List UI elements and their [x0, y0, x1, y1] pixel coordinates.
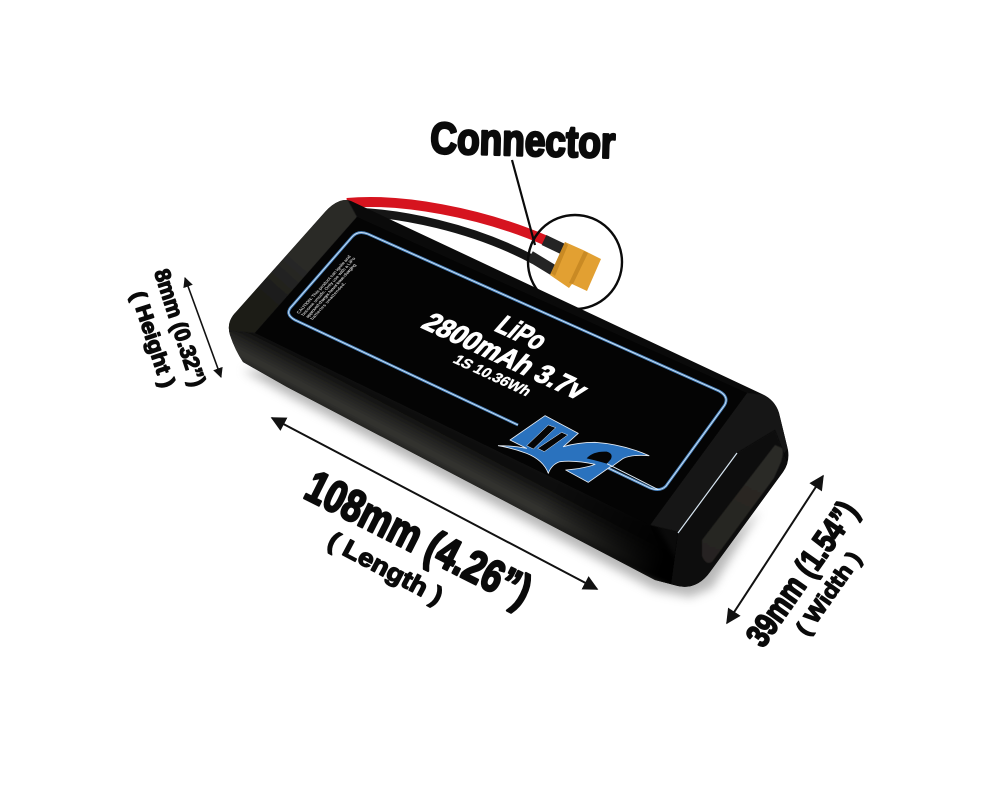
logo notch — [587, 452, 612, 464]
width value: 39mm (1.54”) — [738, 494, 865, 653]
caution text: approved charger. Never leave charging — [304, 263, 357, 319]
infographic: battery with dimensions — [128, 121, 864, 647]
caution text: CAUTION: This product can ignite and — [295, 254, 352, 314]
end highlight — [678, 453, 737, 533]
connector housing — [550, 242, 601, 291]
height value: 8mm (0.32”) — [149, 266, 211, 389]
battery wires — [347, 202, 547, 260]
heat shrink sleeves — [530, 240, 567, 270]
battery body — [224, 195, 795, 600]
capacity and voltage: 2800mAh 3.7v — [415, 308, 594, 405]
connector highlight circle — [528, 215, 622, 309]
end bottom dark — [670, 430, 790, 590]
height arrow — [185, 278, 221, 377]
height dimension — [126, 266, 221, 391]
logo border tail — [607, 464, 658, 490]
label border highlight — [289, 233, 726, 490]
side band — [225, 325, 680, 600]
LiPo title: LiPo — [488, 311, 554, 356]
width dimension — [727, 476, 866, 653]
length arrow — [272, 418, 597, 589]
cell spec: 1S 10.36Wh — [449, 352, 535, 399]
body shell — [229, 200, 788, 587]
caution text: batteries unattended. — [309, 282, 347, 321]
top cap — [224, 195, 357, 333]
connector shade — [551, 242, 588, 284]
black wire — [358, 212, 534, 260]
length caption: ( Length ) — [323, 527, 448, 610]
battery drop shadow — [243, 370, 760, 597]
end cap panel — [702, 445, 783, 563]
width arrow — [727, 476, 823, 623]
end band — [650, 394, 788, 531]
label face — [255, 217, 747, 525]
width caption: ( Width ) — [791, 547, 866, 640]
caution text: become unsafe. Only use with a LiPo — [300, 257, 357, 316]
connector heading: Connector — [430, 114, 616, 168]
red wire — [347, 202, 547, 241]
height caption: ( Height ) — [126, 288, 179, 391]
logo — [498, 416, 658, 490]
body shading — [224, 195, 795, 600]
connector leader line — [512, 160, 535, 245]
blue label border — [289, 233, 726, 490]
length dimension — [272, 418, 597, 616]
connector — [530, 240, 601, 291]
logo slots — [527, 425, 568, 452]
side band fade — [559, 511, 692, 587]
length value: 108mm (4.26”) — [298, 460, 540, 616]
